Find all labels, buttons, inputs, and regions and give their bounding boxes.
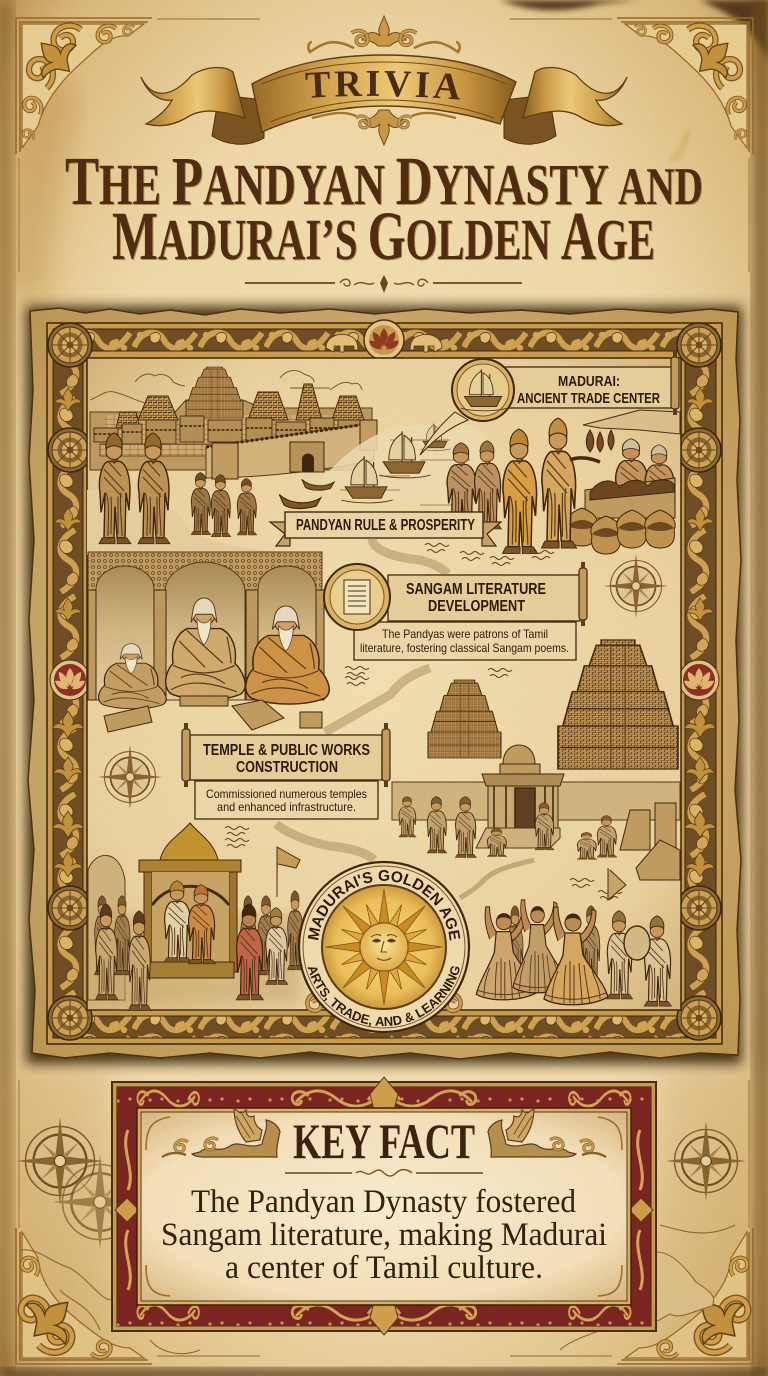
- map sketch behind key fact: [16, 1117, 746, 1354]
- key fact outer frame: [112, 1082, 656, 1331]
- label: Madurai ancient trade center: MADURAI:: [558, 373, 620, 390]
- frame band bottom: [53, 1016, 716, 1038]
- icon: compass left: [98, 745, 162, 809]
- label: Madurai ancient trade center: [420, 351, 679, 455]
- corner ornament: top right: [617, 18, 753, 154]
- throne: [139, 823, 241, 978]
- scene background: [87, 358, 681, 1010]
- dragon ornament left: [162, 1108, 280, 1157]
- label: temple and public works construction: CONSTRUCTION: [236, 759, 338, 776]
- medallion: Madurai's Golden Age: ARTS, TRADE, AND & LEARNING: [308, 966, 460, 1027]
- key fact red band: [117, 1087, 651, 1326]
- banner text: TRIVIA: [305, 71, 460, 100]
- label: Sangam literature development: literature, fostering classical Sangam poems.: [360, 641, 569, 655]
- main gopuram of city: [186, 367, 243, 418]
- title line 2: MADURAI’S GOLDEN AGE: [112, 198, 655, 274]
- scene: walled city: [90, 367, 377, 479]
- torn parchment panel: [28, 308, 741, 1059]
- title divider ornament: [245, 275, 522, 293]
- label: Sangam literature development: SANGAM LITERATURE: [406, 581, 546, 598]
- icon: ship medallion: [452, 359, 514, 421]
- medallion: Madurai's Golden Age: MADURAI'S GOLDEN AGE: [308, 870, 460, 940]
- banner lower flourish: [312, 110, 456, 145]
- frame motifs: lotus vases: [53, 388, 715, 877]
- scene: harbour water and boats: [279, 424, 500, 509]
- compass: upper left: [16, 1117, 104, 1205]
- label: Sangam literature development: DEVELOPMENT: [428, 598, 525, 615]
- compass: partly hidden: [52, 1154, 148, 1250]
- icon: scroll medallion: [324, 564, 390, 630]
- scene: manuscripts on floor: [104, 696, 322, 732]
- corner ornament: top left: [16, 18, 152, 154]
- ribbon: Pandyan Rule and Prosperity: [270, 512, 501, 546]
- label: temple and public works construction: and enhanced infrastructure.: [217, 800, 356, 814]
- key fact cream inner panel: [137, 1108, 631, 1305]
- key fact body: Sangam literature, making Madurai: [161, 1217, 607, 1253]
- scene: poets under arches: [88, 552, 329, 709]
- panel: illustrated scroll: [16, 296, 752, 1074]
- label: Madurai ancient trade center: ANCIENT TRADE CENTER: [517, 390, 660, 407]
- banner main band: [252, 55, 516, 132]
- label: temple and public works construction: [182, 723, 390, 819]
- key fact body: The Pandyan Dynasty fostered: [191, 1184, 576, 1220]
- panel: key fact: [112, 1077, 656, 1335]
- title banner: TRIVIA: [140, 14, 628, 146]
- key fact body: [161, 1184, 607, 1286]
- banner left tail: [141, 67, 264, 144]
- label: Sangam literature development: The Pandyas were patrons of Tamil: [382, 627, 548, 641]
- compass: upper right: [666, 1121, 746, 1201]
- inner corner flourishes: [146, 1117, 622, 1296]
- banner top flourish: [308, 16, 460, 52]
- frame gold base: [47, 323, 722, 1044]
- frame band left: [53, 329, 83, 1038]
- key fact body: a center of Tamil culture.: [225, 1250, 543, 1286]
- corner ornament: bottom right: [617, 1228, 754, 1364]
- banner right tail: [504, 67, 627, 144]
- title line 1: THE PANDYAN DYNASTY AND: [65, 143, 703, 219]
- corner ornament: bottom left: [15, 1228, 152, 1364]
- scene: merchants and market stall: [447, 410, 680, 554]
- main title: [65, 143, 703, 274]
- icon: compass right: [604, 554, 668, 618]
- key fact heading: KEY FACT: [293, 1113, 475, 1169]
- panel shadow: [26, 306, 742, 1064]
- label: temple and public works construction: TEMPLE & PUBLIC WORKS: [203, 742, 370, 759]
- ribbon: Pandyan Rule and Prosperity: PANDYAN RULE & PROSPERITY: [296, 517, 475, 534]
- scene: dancers and drummers: [476, 868, 671, 1006]
- scene: temple complex: [392, 640, 680, 848]
- dragon ornament right: [488, 1108, 606, 1157]
- subtext box: [195, 781, 378, 819]
- key fact band ornaments: [115, 1077, 653, 1335]
- scene: temple builders: [399, 796, 680, 880]
- label: Sangam literature development: [324, 562, 587, 660]
- frame corner and mid roundels: [48, 320, 721, 1040]
- sun face: [360, 923, 408, 971]
- scene: ground and left figures: [87, 433, 300, 555]
- key fact divider: [285, 1170, 483, 1176]
- frame band right: [685, 329, 716, 1038]
- subtext box: [354, 622, 576, 660]
- medallion: Madurai's Golden Age: [298, 860, 470, 1034]
- sun rays: [326, 889, 442, 1005]
- label: temple and public works construction: Commissioned numerous temples: [206, 787, 367, 801]
- frame band top: [53, 329, 716, 351]
- scene: river and map scribbles: [225, 538, 622, 900]
- scene: clouds and sky: [90, 371, 362, 404]
- scene: royal procession and throne: [88, 823, 304, 1010]
- medallion base flourishes: [307, 993, 461, 1011]
